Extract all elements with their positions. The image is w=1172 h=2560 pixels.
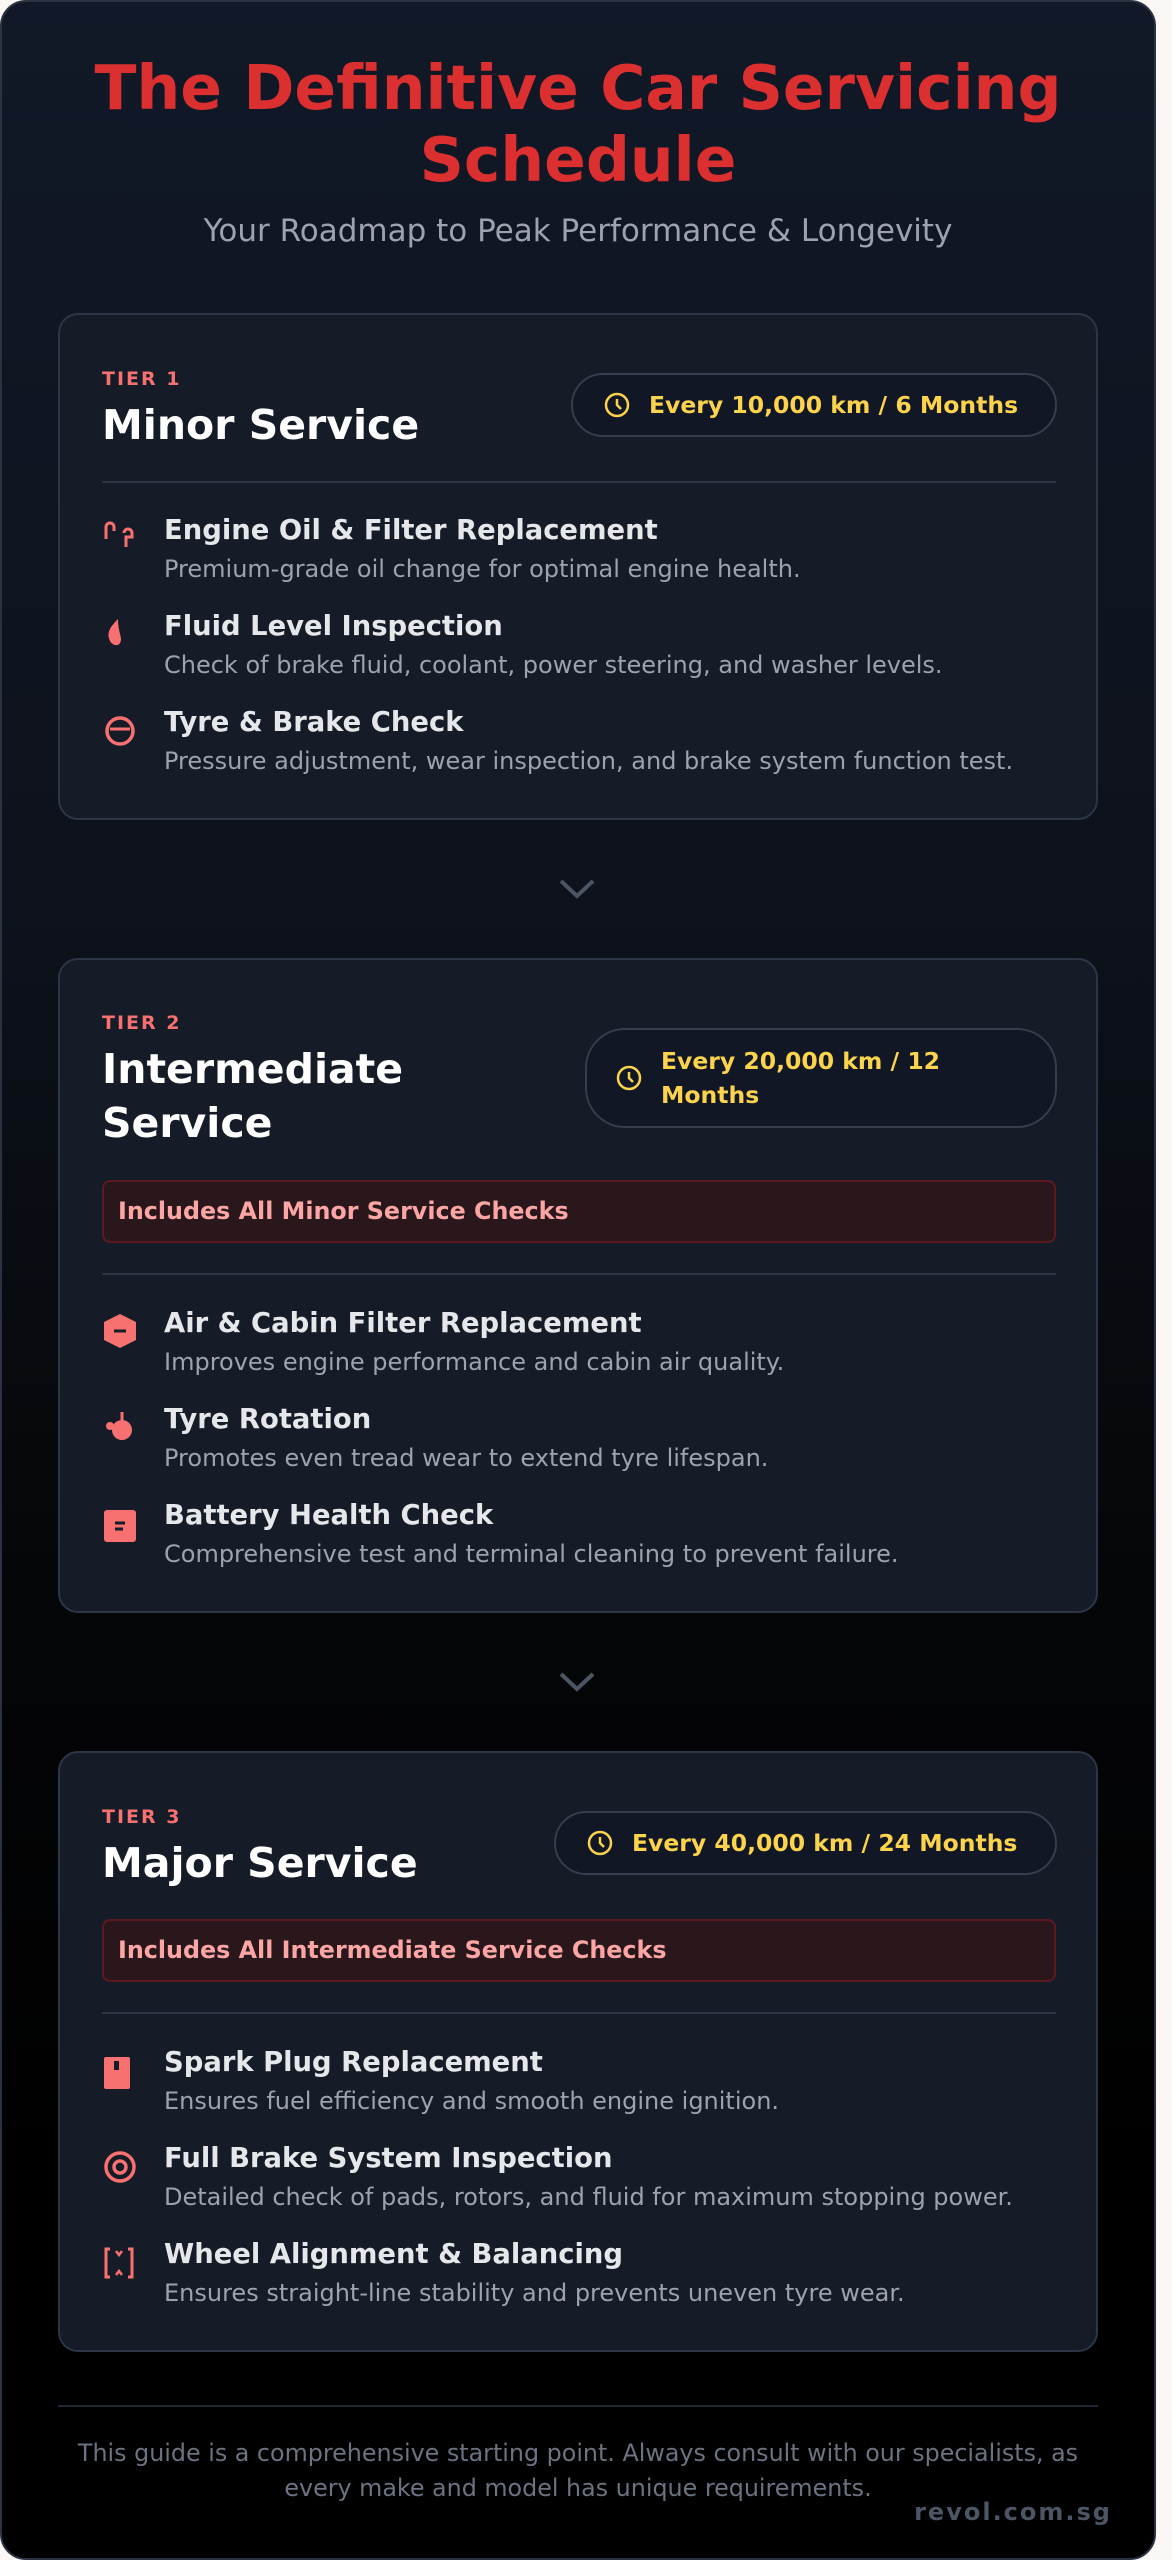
item: brake system: Detailed check of pads, rotors, and fluid for maximum stopping power.	[164, 2183, 1013, 2211]
heading: minor service: Minor Service	[102, 401, 419, 449]
item: spark plug: Spark Plug Replacement	[164, 2047, 543, 2078]
footer brand: revol.com.sg	[914, 2498, 1112, 2526]
callout: includes intermediate: Includes All Intermediate Service Checks	[118, 1936, 667, 1964]
pill: interval	[571, 373, 1057, 437]
panel: tier 1 minor service	[58, 313, 1098, 820]
item: brake system: Full Brake System Inspection	[164, 2143, 612, 2174]
arrow: chevron 2	[560, 1672, 594, 1692]
title: Schedule	[420, 124, 736, 196]
footer note	[78, 2439, 1078, 2502]
callout: includes intermediate	[102, 1919, 1056, 1982]
pill: interval	[554, 1811, 1057, 1875]
item: spark plug: Ensures fuel efficiency and smooth engine ignition.	[164, 2087, 779, 2115]
item: tyre brake	[105, 707, 1013, 775]
item: engine oil: Premium-grade oil change for optimal engine health.	[164, 555, 801, 583]
heading: major service: Major Service	[102, 1839, 418, 1887]
item: brake system	[104, 2143, 1013, 2211]
item: battery: Battery Health Check	[164, 1500, 493, 1531]
tier label: TIER 3	[102, 1806, 181, 1828]
item: fluid level: Fluid Level Inspection	[164, 611, 503, 642]
tier label: TIER 2	[102, 1012, 181, 1034]
pill: interval: Months	[661, 1081, 759, 1109]
pill: interval: Every 40,000 km / 24 Months	[632, 1829, 1017, 1857]
item: wheel alignment: Wheel Alignment & Balancing	[164, 2239, 623, 2270]
pill: interval: Every 10,000 km / 6 Months	[649, 391, 1018, 419]
heading: intermediate service: Service	[102, 1099, 272, 1147]
item: wheel alignment	[104, 2239, 905, 2307]
item: air filter: Air & Cabin Filter Replacement	[164, 1308, 642, 1339]
pill: interval	[585, 1028, 1057, 1128]
title: The Definitive Car Servicing	[94, 52, 1061, 124]
callout: includes minor	[102, 1180, 1056, 1243]
panel: tier 3 major service	[58, 1751, 1098, 2352]
item: spark plug	[104, 2047, 779, 2115]
item: tyre rotation	[106, 1404, 768, 1472]
tier label: TIER 1	[102, 368, 181, 390]
item: tyre rotation: Promotes even tread wear to extend tyre lifespan.	[164, 1444, 768, 1472]
item: fluid level: Check of brake fluid, coolant, power steering, and washer levels.	[164, 651, 943, 679]
heading: intermediate service	[102, 1045, 403, 1147]
item: tyre brake: Tyre & Brake Check	[164, 707, 463, 738]
pill: interval: Every 20,000 km / 12	[661, 1047, 940, 1075]
callout: includes minor: Includes All Minor Service Checks	[118, 1197, 569, 1225]
footer note: every make and model has unique requirements.	[284, 2474, 872, 2502]
item: fluid level	[108, 611, 943, 679]
item: tyre rotation: Tyre Rotation	[164, 1404, 371, 1435]
arrow: chevron 1	[560, 880, 594, 899]
item: air filter: Improves engine performance and cabin air quality.	[164, 1348, 784, 1376]
item: engine oil	[104, 515, 801, 583]
panel: tier 2 intermediate service	[58, 958, 1098, 1613]
item: engine oil: Engine Oil & Filter Replacement	[164, 515, 658, 546]
item: battery: Comprehensive test and terminal cleaning to prevent failure.	[164, 1540, 899, 1568]
item: air filter	[104, 1308, 784, 1376]
footer note: This guide is a comprehensive starting point. Always consult with our specialists, as	[78, 2439, 1078, 2467]
item: tyre brake: Pressure adjustment, wear inspection, and brake system function test.	[164, 747, 1013, 775]
heading: intermediate service: Intermediate	[102, 1045, 403, 1093]
item: wheel alignment: Ensures straight-line stability and prevents uneven tyre wear.	[164, 2279, 905, 2307]
item: battery	[104, 1500, 899, 1568]
subtitle: Your Roadmap to Peak Performance & Longevity	[204, 213, 952, 249]
title	[94, 52, 1061, 196]
